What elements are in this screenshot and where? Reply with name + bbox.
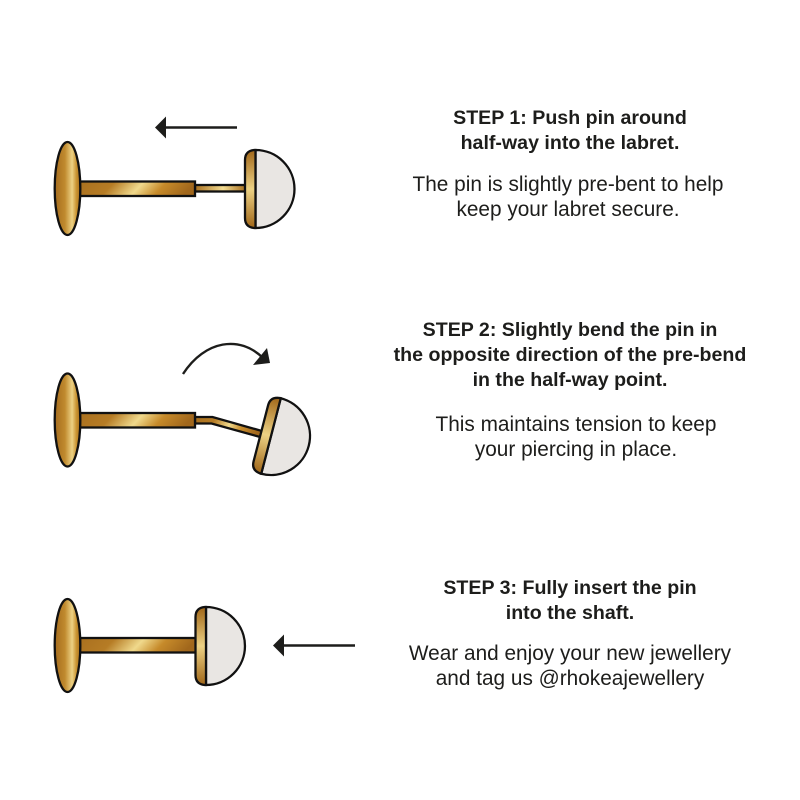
step 2 arrow: curved	[183, 344, 270, 374]
step 1 labret: pin half inserted	[55, 142, 294, 235]
step 1 description: The pin is slightly pre-bent to help	[413, 173, 723, 196]
step 2 heading: STEP 2: Slightly bend the pin in	[423, 319, 717, 341]
dome head	[196, 607, 245, 685]
step 2 heading: in the half-way point.	[473, 369, 667, 391]
step 3 arrow: left	[273, 634, 355, 656]
step 2 description: This maintains tension to keep	[436, 413, 716, 436]
step 3 heading: STEP 3: Fully insert the pin	[443, 577, 697, 599]
shaft	[80, 413, 195, 428]
step 1 description	[412, 173, 723, 221]
step 2 heading: the opposite direction of the pre-bend	[394, 344, 746, 366]
step 1 heading: STEP 1: Push pin around	[453, 107, 687, 129]
step 3 description: and tag us @rhokeajewellery	[436, 667, 704, 690]
step 2 labret: pin bent	[55, 374, 319, 484]
step 3 heading: into the shaft.	[506, 602, 634, 624]
step 3 heading	[443, 577, 697, 624]
step 2 description: your piercing in place.	[475, 438, 677, 461]
step 2 description	[436, 413, 716, 461]
shaft	[80, 182, 195, 196]
bent pin	[195, 417, 262, 437]
step 1 arrow: left	[155, 116, 237, 138]
disc back	[55, 599, 80, 692]
tilted dome head	[251, 396, 319, 484]
disc back	[55, 142, 80, 235]
dome head	[245, 150, 294, 228]
disc back	[55, 374, 80, 466]
step 2 heading	[394, 319, 746, 391]
step 1 heading	[453, 107, 687, 154]
step 1 description: keep your labret secure.	[456, 198, 680, 221]
shaft	[80, 638, 196, 652]
step 3 description: Wear and enjoy your new jewellery	[409, 642, 731, 665]
step 3 description	[409, 642, 731, 690]
step 1 heading: half-way into the labret.	[461, 132, 679, 154]
step 3 labret: pin fully inserted	[55, 599, 245, 692]
pin	[195, 185, 246, 192]
